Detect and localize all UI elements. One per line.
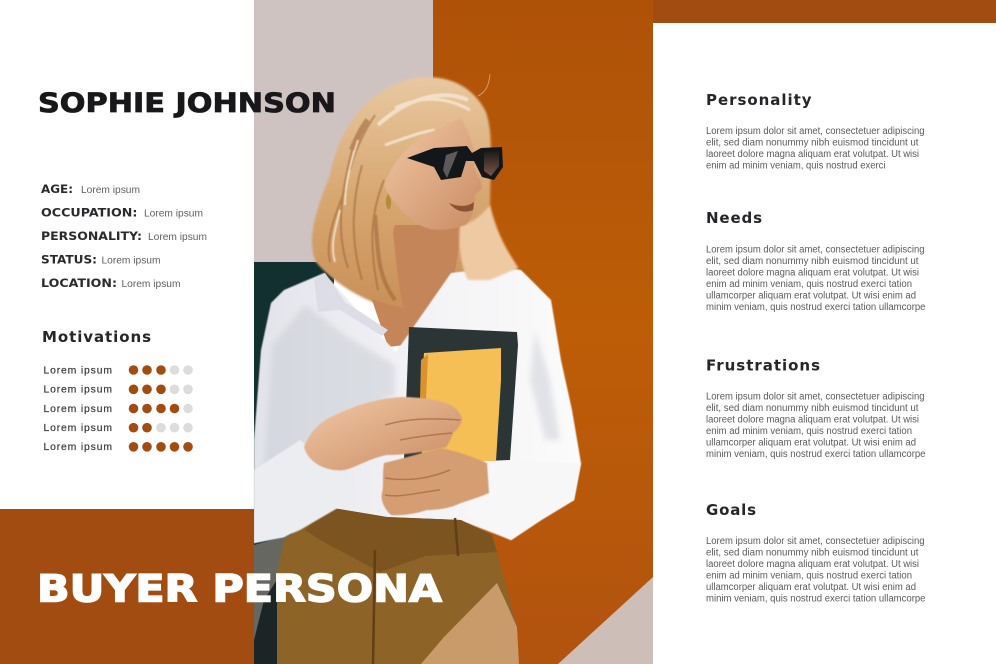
text: frustrations body <box>706 392 926 460</box>
location: LOCATION: <box>41 276 117 290</box>
text: goals body: elit, sed diam nonummy nibh euismod tincidunt ut <box>706 548 919 558</box>
text: goals body: enim ad minim veniam, quis nostrud exerci tation <box>706 570 912 582</box>
book <box>404 327 518 462</box>
face <box>384 118 482 230</box>
hair back <box>312 77 518 310</box>
rating row 5 <box>44 442 193 453</box>
lower left backdrop <box>254 535 290 664</box>
occupation: Lorem ipsum <box>144 208 203 220</box>
section: personality <box>706 91 924 172</box>
lens reflection <box>443 151 458 178</box>
text: needs body: enim ad minim veniam, quis nostrud exerci tation <box>706 279 912 290</box>
heading: motivations: Motivations <box>42 328 151 346</box>
panel: left brown block <box>0 509 254 664</box>
panel: top right brown band <box>653 0 996 23</box>
text: personality body: enim ad minim veniam, quis nostrud exerci <box>706 160 886 172</box>
photo backdrop: orange wall <box>433 0 653 664</box>
shirt <box>254 267 581 543</box>
trousers <box>277 507 519 664</box>
hair front <box>315 79 476 308</box>
text: personality body: laoreet dolore magna aliquam erat volutpat. Ut wisi <box>706 149 919 160</box>
status: STATUS: <box>41 252 97 266</box>
heading: frustrations: Frustrations <box>706 356 820 374</box>
status <box>41 252 161 266</box>
heading: needs: Needs <box>706 209 762 227</box>
section: frustrations <box>706 356 926 460</box>
hair highlights <box>333 95 470 262</box>
age <box>41 182 140 196</box>
profile details <box>41 182 207 290</box>
rating row 2 <box>44 384 193 396</box>
earring <box>386 194 391 210</box>
text: needs body: ullamcorper aliquam erat volutpat. Ut wisi enim ad <box>706 290 916 302</box>
occupation: OCCUPATION: <box>41 206 138 220</box>
location: Lorem ipsum <box>122 278 181 290</box>
upper hand <box>304 397 462 470</box>
title: name: SOPHIE JOHNSON <box>38 88 336 119</box>
text: personality body <box>706 126 924 172</box>
title: buyer persona: BUYER PERSONA <box>37 566 442 610</box>
face shadow mouth and nose <box>449 202 474 212</box>
right sleeve cuff <box>465 460 581 540</box>
text: needs body <box>706 244 926 313</box>
text: frustrations body: elit, sed diam nonummy nibh euismod tincidunt ut <box>706 403 919 414</box>
motivations rating list <box>44 365 193 453</box>
text: needs body: Lorem ipsum dolor sit amet, consectetuer adipiscing <box>706 244 924 256</box>
trousers highlight <box>421 583 519 664</box>
location <box>41 276 181 290</box>
photo backdrop: light corner <box>558 577 653 664</box>
text: goals body <box>706 536 926 604</box>
sunglasses <box>407 146 503 180</box>
frames <box>407 146 503 180</box>
section: needs <box>706 209 926 313</box>
heading: goals: Goals <box>706 501 756 519</box>
rating row 2: Lorem ipsum <box>44 384 112 396</box>
book cover <box>404 327 518 462</box>
text: goals body: ullamcorper aliquam erat volutpat. Ut wisi enim ad <box>706 582 916 593</box>
text: frustrations body: minim veniam, quis nostrud exerci tation ullamcorpe <box>706 449 926 460</box>
age: AGE: <box>41 182 73 196</box>
rating row 1 <box>44 365 193 376</box>
text: needs body: minim veniam, quis nostrud exerci tation ullamcorpe <box>706 302 926 313</box>
personality <box>41 229 207 243</box>
text: frustrations body: ullamcorper aliquam erat volutpat. Ut wisi enim ad <box>706 438 916 448</box>
rating row 4 <box>44 423 193 434</box>
hair stray strand <box>478 74 490 96</box>
section: goals <box>706 501 926 604</box>
photo: woman holding a book <box>254 0 653 664</box>
text: needs body: laoreet dolore magna aliquam erat volutpat. Ut wisi <box>706 268 919 278</box>
knuckle shadows <box>385 419 460 496</box>
text: personality body: elit, sed diam nonummy nibh euismod tincidunt ut <box>706 138 919 148</box>
photo backdrop: dark wall <box>254 262 334 664</box>
yellow notebook <box>421 348 501 461</box>
rating row 5: Lorem ipsum <box>44 442 112 453</box>
status: Lorem ipsum <box>102 254 161 266</box>
trousers seam <box>373 518 458 664</box>
shirt collar <box>314 273 388 336</box>
hair right side, sun-lit <box>459 205 518 280</box>
hair shadow strands <box>329 115 395 300</box>
text: goals body: laoreet dolore magna aliquam erat volutpat. Ut wisi <box>706 559 919 570</box>
text: personality body: Lorem ipsum dolor sit amet, consectetuer adipiscing <box>706 126 924 137</box>
text: frustrations body: laoreet dolore magna aliquam erat volutpat. Ut wisi <box>706 414 919 426</box>
shirt shadow folds <box>258 305 560 532</box>
text: goals body: minim veniam, quis nostrud exerci tation ullamcorpe <box>706 594 926 604</box>
neck <box>372 225 462 347</box>
rating row 4: Lorem ipsum <box>44 423 112 434</box>
photo backdrop: grey wall <box>254 0 434 264</box>
age: Lorem ipsum <box>81 184 140 196</box>
heading: personality: Personality <box>706 91 812 109</box>
personality: Lorem ipsum <box>148 231 207 243</box>
rating row 3: Lorem ipsum <box>44 404 112 415</box>
right lens <box>484 151 499 176</box>
text: needs body: elit, sed diam nonummy nibh euismod tincidunt ut <box>706 256 919 267</box>
occupation <box>41 206 203 220</box>
personality: PERSONALITY: <box>41 229 142 243</box>
text: frustrations body: Lorem ipsum dolor sit amet, consectetuer adipiscing <box>706 392 924 402</box>
left sleeve cuff <box>254 440 360 543</box>
lower hand <box>382 448 489 515</box>
rating row 1: Lorem ipsum <box>44 366 112 376</box>
rating row 3 <box>44 404 193 415</box>
text: frustrations body: enim ad minim veniam, quis nostrud exerci tation <box>706 426 912 437</box>
text: goals body: Lorem ipsum dolor sit amet, consectetuer adipiscing <box>706 536 924 547</box>
trousers waistband <box>305 507 497 572</box>
